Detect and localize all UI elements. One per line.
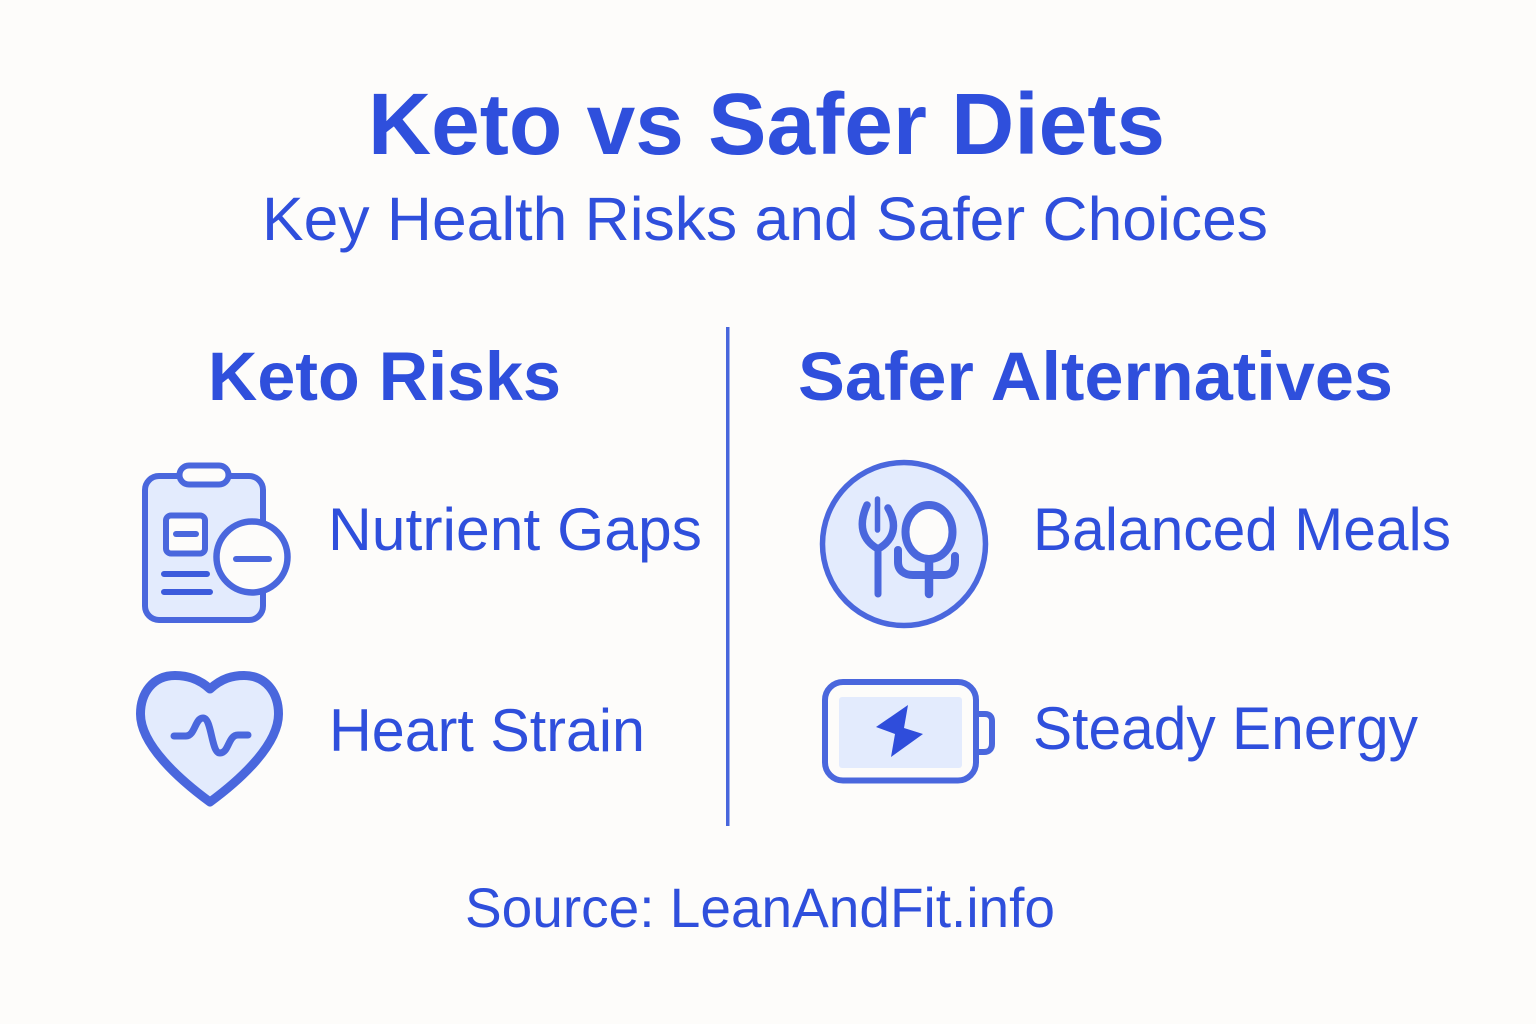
panel: safer alternatives	[798, 338, 1451, 780]
label: steady energy: Steady Energy	[1033, 695, 1418, 762]
icon: clipboard with minus	[145, 466, 288, 620]
divider	[726, 327, 730, 826]
subtitle: Key Health Risks and Safer Choices	[262, 185, 1268, 253]
label: nutrient gaps: Nutrient Gaps	[328, 496, 702, 563]
label: balanced meals: Balanced Meals	[1033, 496, 1451, 563]
heading: keto risks: Keto Risks	[208, 338, 561, 415]
icon: plate with fork and spoon	[822, 462, 986, 626]
heading: safer alternatives: Safer Alternatives	[798, 338, 1393, 415]
source: Source: LeanAndFit.info	[465, 876, 1055, 939]
label: heart strain: Heart Strain	[329, 697, 645, 764]
icon: battery with bolt	[825, 682, 992, 780]
title: Keto vs Safer Diets	[368, 76, 1165, 173]
panel: keto risks	[140, 338, 702, 802]
icon: heart with pulse	[140, 676, 278, 802]
